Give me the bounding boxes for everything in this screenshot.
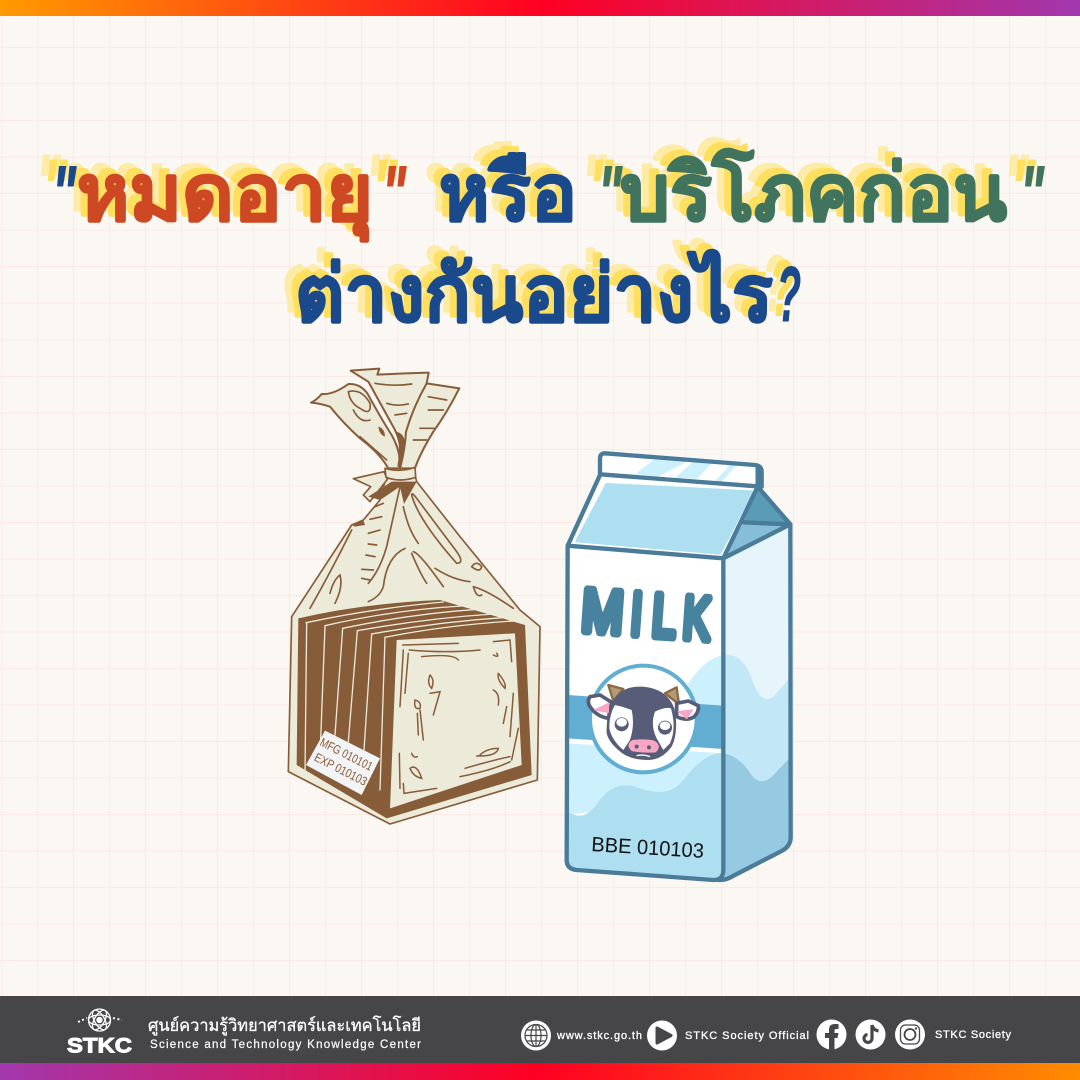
STKC logo <box>67 1008 132 1058</box>
title shadow: yellow: " <box>43 143 68 231</box>
nose <box>628 739 659 753</box>
title shadow: light yellow <box>36 136 1029 327</box>
title shadow: light yellow: หรือ <box>425 138 563 226</box>
title shadow: light yellow: " <box>366 138 391 226</box>
icon: tiktok <box>856 1020 886 1050</box>
ruffle dark folds <box>378 427 405 467</box>
logo wordmark: STKC <box>67 1034 132 1058</box>
website text: www.stkc.go.th <box>556 1030 642 1042</box>
seal highlights <box>635 460 737 482</box>
best before text: BBE 010103 <box>591 833 705 863</box>
loaf crust <box>297 600 532 818</box>
front face <box>567 547 723 880</box>
title shadow: yellow: บริโภคก่อน <box>613 141 1000 231</box>
title line 1: หมดอายุ <box>77 149 373 242</box>
front upper wave <box>688 655 723 708</box>
title shadow: light yellow: " <box>36 138 61 226</box>
illustration: bread loaf in bag <box>288 369 540 824</box>
title shadow: light yellow: " <box>582 138 607 226</box>
title <box>36 136 1045 338</box>
top gradient bar <box>0 0 1080 16</box>
icon: facebook <box>816 1020 846 1050</box>
title shadow: light yellow: ? <box>763 239 787 327</box>
bottom gradient bar <box>0 1063 1080 1080</box>
title line 1: หรือ <box>439 149 577 237</box>
ears <box>588 695 612 718</box>
top seal <box>600 453 760 487</box>
MILK lettering: L <box>650 582 679 650</box>
badge circle <box>590 666 697 772</box>
eyes <box>615 717 629 731</box>
cow badge <box>588 666 698 772</box>
title shadow: yellow: หรือ <box>432 143 570 231</box>
front lower dark wave <box>567 753 723 880</box>
bag silhouette <box>288 475 540 824</box>
title line 1: " <box>52 149 77 237</box>
title shadow: yellow: หมดอายุ <box>70 143 366 236</box>
title line 2: ต่างกันอย่างไร <box>295 249 773 338</box>
icon: globe <box>521 1020 551 1050</box>
title shadow: light yellow: บริโภคก่อน <box>606 136 993 226</box>
slice lines <box>305 602 518 790</box>
title shadow: yellow: " <box>373 143 398 231</box>
icon: instagram <box>895 1020 925 1050</box>
roof side fold <box>743 487 789 524</box>
social text: STKC Society <box>935 1029 1012 1041</box>
title line 1: " <box>382 149 407 237</box>
center name English: Science and Technology Knowledge Center <box>150 1039 421 1051</box>
title line 1: " <box>598 149 623 237</box>
title shadow: light yellow: หมดอายุ <box>63 138 359 231</box>
title shadow: light yellow: ต่างกันอย่างไร <box>281 238 759 327</box>
icon: play <box>647 1020 677 1050</box>
title shadow: yellow: " <box>589 143 614 231</box>
title shadow: yellow: " <box>1011 143 1036 231</box>
title shadow: yellow <box>43 141 1036 332</box>
title line 1: บริโภคก่อน <box>620 147 1007 237</box>
title shadow: yellow: ต่างกันอย่างไร <box>288 243 766 332</box>
illustration: milk carton <box>567 453 791 880</box>
right side middle wave <box>723 655 789 812</box>
title shadow: light yellow: " <box>1004 138 1029 226</box>
MILK lettering: M <box>579 577 626 647</box>
carton roof <box>568 475 758 557</box>
right side lower wave <box>718 753 790 880</box>
bag top ruffles <box>311 369 459 468</box>
MILK lettering: K <box>681 584 713 653</box>
slice face <box>390 633 522 808</box>
title line 1: " <box>1020 149 1045 237</box>
ruffle crease marks <box>348 383 447 460</box>
date label <box>306 731 380 795</box>
MILK lettering <box>579 577 713 653</box>
footer bar <box>0 996 1080 1063</box>
bag folds <box>310 487 513 608</box>
title line 1 <box>52 147 1045 242</box>
MILK lettering: I <box>629 580 645 648</box>
carton outlines <box>567 453 791 880</box>
youtube text: STKC Society Official <box>685 1030 809 1042</box>
neck shadow <box>352 482 417 527</box>
blue band <box>568 695 723 749</box>
face <box>606 687 676 760</box>
date label: MFG 010101 <box>318 735 375 774</box>
title line 2: ? <box>777 250 801 338</box>
right side face <box>718 525 790 880</box>
title shadow: yellow: ? <box>770 244 794 332</box>
horns <box>608 685 679 704</box>
tie and strap <box>353 467 416 502</box>
center name Thai: ศูนย์ความรู้วิทยาศาสตร์และเทคโนโลยี <box>148 1015 421 1036</box>
logo atom icon <box>78 1008 122 1032</box>
front lower light wave <box>568 743 723 815</box>
date label: EXP 010103 <box>312 750 370 789</box>
slice face texture <box>399 640 518 793</box>
